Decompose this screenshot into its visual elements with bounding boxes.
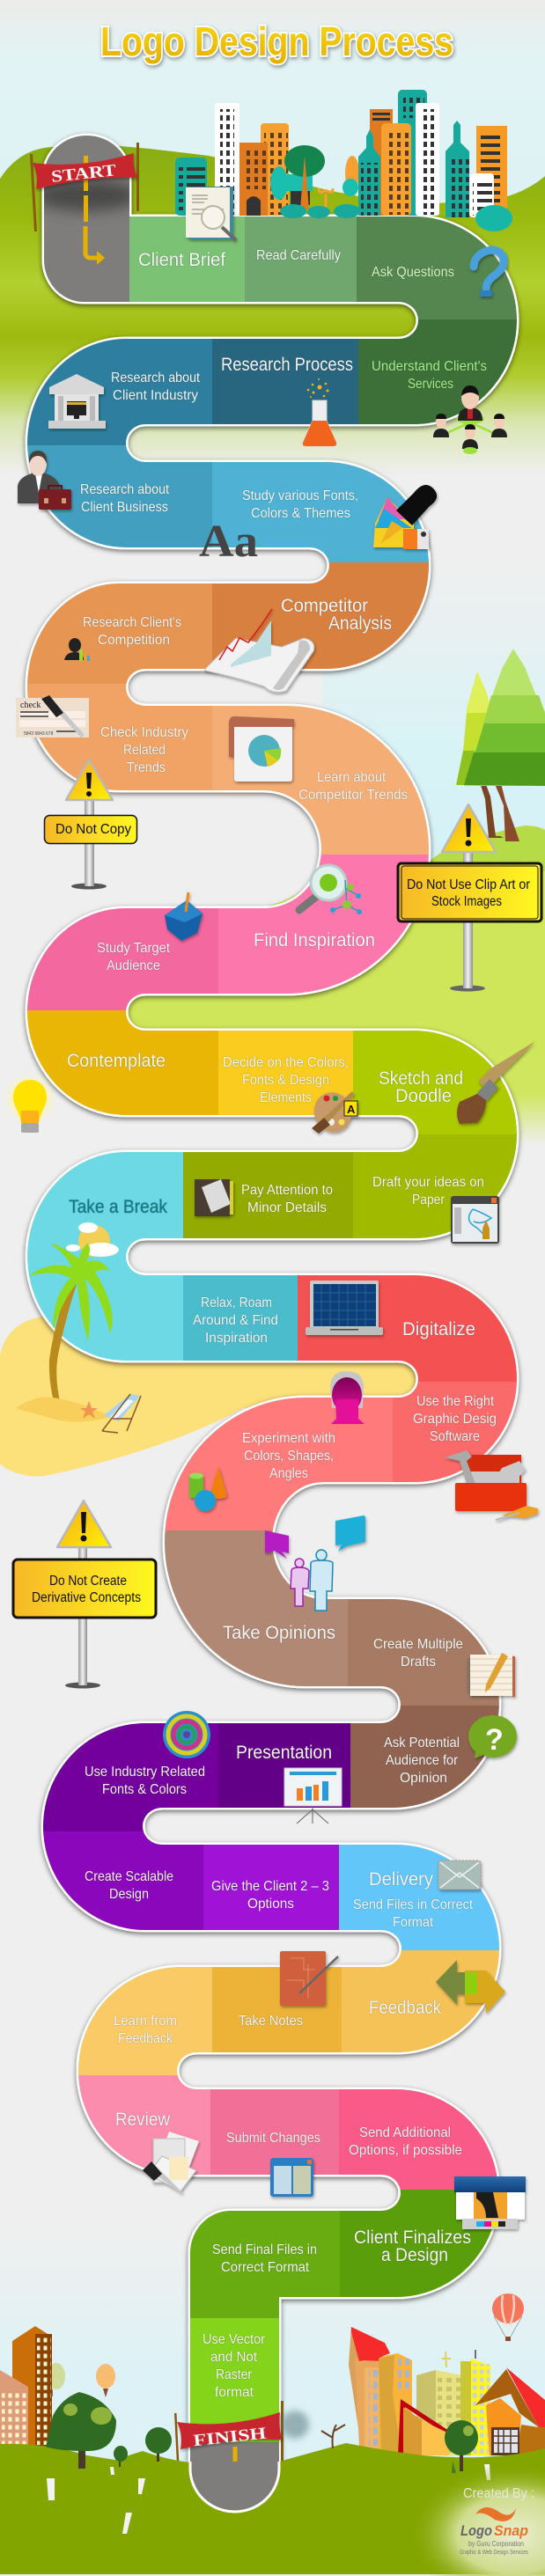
label: Submit Changes: Submit Changes: [226, 2131, 320, 2146]
icon: colour swatches with dropper: [373, 485, 437, 549]
label: Contemplate: Contemplate: [67, 1050, 166, 1071]
warning post: Do Not Copy: Do Not Copy: [55, 822, 131, 837]
sand beach: [0, 1316, 418, 1477]
title: Logo Design Process: [100, 18, 453, 64]
label: Ask Potential Audience for Opinion: Opinion: [400, 1771, 447, 1786]
label: Research Client's Competition: [83, 615, 181, 648]
icon: brief with magnifier: [186, 187, 236, 240]
label: Use Vector and Not Raster format: Use Vector: [203, 2332, 266, 2347]
icon: Aa type sample: Aa: [199, 517, 258, 567]
balloon: left orange: [96, 2364, 115, 2397]
lime meadow fading: [414, 1031, 545, 1145]
label: Use the Right Graphic Desig Software: Use the Right: [416, 1394, 495, 1409]
label: Send Additional Options, if possible: Options, if possible: [349, 2143, 462, 2158]
label: Competitor Analysis: Competitor: [281, 595, 368, 616]
icon: feedback arrows: [436, 1960, 505, 2014]
balloon: right: [492, 2293, 524, 2341]
label: Send Additional Options, if possible: Send Additional: [359, 2125, 451, 2140]
label: Sketch and Doodle: Sketch and: [379, 1068, 463, 1089]
white fence posts: [47, 2464, 490, 2534]
label: Decide on the Colors, Fonts & Design Elements: Elements: [260, 1090, 312, 1105]
label: Digitalize: Digitalize: [402, 1318, 475, 1339]
icon: magnifier with molecule: [299, 865, 362, 914]
icon: notebook: [195, 1179, 233, 1216]
icon: rainbow spiral disc: [163, 1711, 210, 1758]
label: Understand Client's Services: Understand Client's: [372, 359, 487, 374]
label: Study various Fonts, Colors & Themes: [242, 488, 358, 521]
warning post: Do Not Use Clip Art: [398, 804, 541, 991]
sky: middle right: [323, 563, 545, 867]
label: Experiment with Colors, Shapes, Angles: Colors, Shapes,: [244, 1449, 334, 1464]
label: Competitor Analysis: Analysis: [328, 613, 392, 634]
label: Research about Client Business: Research about: [80, 482, 169, 497]
icon: toolbox: [445, 1450, 538, 1520]
credit: created by: Created By :: [463, 2486, 534, 2501]
label: Learn about Competitor Trends: Learn about: [317, 770, 387, 785]
label: Send Final Files in Correct Format: Correct Format: [221, 2260, 310, 2275]
label: Understand Client's Services: Services: [408, 377, 453, 392]
warning post: Do Not Create Derivative Concepts: Derivative Concepts: [32, 1590, 141, 1605]
road foot outline: [190, 2462, 279, 2512]
icon: flask: [303, 378, 336, 446]
warning post: Do Not Use Clip Art: Do Not Use Clip Art or: [407, 877, 530, 892]
icon: question mark: [474, 250, 504, 297]
label: Use Industry Related Fonts & Colors: Use Industry Related: [85, 1765, 205, 1780]
corner glow behind credit: [409, 2464, 545, 2576]
label: Client Brief: Client Brief: [138, 249, 225, 270]
icon: beach mound with starfish and chair: [16, 1394, 141, 1433]
banner: start: [33, 153, 137, 189]
label: Research Client's Competition: Competition: [98, 633, 170, 648]
label: Take Opinions: Take Opinions: [223, 1622, 335, 1643]
icon: envelope: [438, 1860, 481, 1890]
label: Delivery: Delivery: [369, 1868, 433, 1890]
label: Review: Review: [115, 2109, 170, 2130]
icon: cheque with pen: check: [20, 701, 41, 710]
green hills behind the start: [0, 145, 545, 475]
label: Send Final Files in Correct Format: Send Final Files in: [212, 2242, 317, 2257]
icon: laptop: [306, 1281, 383, 1335]
label: Send Final Files in Correct Format: [212, 2242, 317, 2275]
icon: green question bubble: [468, 1715, 517, 1758]
grassy island under trees: [423, 826, 545, 871]
label: Research Client's Competition: Research Client's: [83, 615, 181, 630]
trees: right side: [456, 649, 545, 841]
label: Use the Right Graphic Desig Software: [413, 1394, 497, 1444]
label: Research about Client Business: Client Business: [81, 500, 168, 515]
label: Use the Right Graphic Desig Software: Software: [430, 1429, 480, 1444]
label: Research about Client Industry: Client Industry: [113, 388, 198, 403]
icon: blue software window: [270, 2158, 313, 2197]
label: Understand Client's Services: [372, 359, 487, 392]
arrow: start lane: [85, 226, 105, 265]
label: Send Files in Correct Format: Format: [393, 1915, 434, 1930]
credit: created by: Snap: [494, 2522, 528, 2539]
green ground: left: [0, 2443, 545, 2574]
label: Study various Fonts, Colors & Themes: Colors & Themes: [251, 506, 350, 521]
credit: created by: Logo: [460, 2522, 492, 2539]
label: Learn from Feedback: Learn from: [114, 2014, 177, 2029]
warning post: Do Not Create Derivative Concepts: [13, 1501, 156, 1688]
label: Check Industry Related Trends: Trends: [127, 760, 166, 775]
icon: papers and pen: [143, 2132, 199, 2194]
shadow behind finish banner: [281, 2411, 309, 2439]
icon: pie chart calendar: [229, 716, 294, 782]
icon: blue target cube: [165, 892, 203, 941]
label: Pay Attention to Minor Details: Minor Details: [247, 1200, 327, 1215]
label: Sketch and Doodle: Doodle: [395, 1085, 452, 1106]
icon: two people figures: [291, 1550, 333, 1611]
label: Draft your ideas on Paper: Paper: [412, 1193, 446, 1207]
label: Give the Client 2 – 3 Options: Give the Client 2 – 3: [211, 1879, 329, 1894]
label: Ask Potential Audience for Opinion: [384, 1736, 460, 1786]
label: Decide on the Colors, Fonts & Design Elements: [223, 1055, 349, 1105]
label: Learn from Feedback: Feedback: [118, 2031, 173, 2046]
icon: businessman with briefcase: [18, 451, 71, 510]
label: Relax, Roam Around & Find Inspiration: [193, 1295, 278, 1346]
icon: paint brush: [457, 1041, 535, 1124]
icon: 3D shapes: [189, 1466, 227, 1511]
label: Experiment with Colors, Shapes, Angles: Angles: [269, 1466, 308, 1481]
icon: speech bubble blue: [335, 1516, 365, 1552]
label: Create Multiple Drafts: Drafts: [401, 1655, 436, 1670]
label: Sketch and Doodle: [379, 1068, 463, 1106]
credit: created by: [460, 2486, 534, 2556]
label: Create Multiple Drafts: [373, 1637, 463, 1670]
label: Pay Attention to Minor Details: Pay Attention to: [241, 1183, 333, 1198]
label: Use Vector and Not Raster format: [203, 2332, 266, 2400]
label: Relax, Roam Around & Find Inspiration: Inspiration: [205, 1331, 268, 1346]
label: Create Multiple Drafts: Create Multiple: [373, 1637, 463, 1652]
sign pole: start right: [136, 143, 139, 211]
label: Research about Client Industry: [111, 371, 200, 403]
icon: competitor silhouette with bars: [64, 638, 90, 661]
label: Send Files in Correct Format: [353, 1897, 474, 1930]
label: Use Industry Related Fonts & Colors: [85, 1765, 205, 1797]
label: Study Target Audience: [97, 941, 171, 973]
label: Pay Attention to Minor Details: [241, 1183, 333, 1215]
icon: bank building: [48, 374, 106, 429]
label: Ask Potential Audience for Opinion: Ask Potential: [384, 1736, 460, 1750]
banner: finish: FINISH: [193, 2425, 268, 2450]
buildings: right: [349, 2327, 545, 2455]
label: Presentation: Presentation: [236, 1742, 332, 1763]
icon: light bulb: [9, 1077, 51, 1133]
icon: green question bubble: ?: [485, 1723, 504, 1757]
icon: chart on paper roll: [205, 609, 314, 693]
icon: speech bubble purple: [265, 1530, 289, 1559]
label: Take a Break: Take a Break: [69, 1196, 167, 1217]
label: Give the Client 2 – 3 Options: [211, 1879, 329, 1912]
label: Use Industry Related Fonts & Colors: Fonts & Colors: [102, 1782, 187, 1797]
label: Ask Questions: Ask Questions: [372, 265, 454, 280]
label: Check Industry Related Trends: Related: [123, 743, 166, 758]
credit: created by: Graphic & Web Design Services: [460, 2550, 528, 2556]
label: Use Vector and Not Raster format: format: [215, 2385, 254, 2400]
sign pole: start left: [30, 154, 37, 231]
label: Find Inspiration: Find Inspiration: [254, 929, 375, 950]
label: Decide on the Colors, Fonts & Design Elements: Decide on the Colors,: [223, 1055, 349, 1070]
sky: bottom: [0, 2227, 545, 2473]
label: Use Vector and Not Raster format: and Not: [210, 2350, 258, 2365]
label: Draft your ideas on Paper: [372, 1175, 484, 1207]
label: Decide on the Colors, Fonts & Design Elements: Fonts & Design: [242, 1073, 329, 1088]
arrow: finish lane: [229, 2447, 241, 2488]
label: Relax, Roam Around & Find Inspiration: Relax, Roam: [201, 1295, 272, 1310]
label: Client Finalizes a Design: [354, 2227, 471, 2265]
label: Study various Fonts, Colors & Themes: Study various Fonts,: [242, 488, 358, 503]
icon: palm tree: [29, 1244, 113, 1410]
balloon: left green: [48, 2363, 65, 2396]
icon: palette with letter A: [308, 1087, 357, 1138]
label: Experiment with Colors, Shapes, Angles: Experiment with: [242, 1431, 335, 1446]
label: Experiment with Colors, Shapes, Angles: [242, 1431, 335, 1481]
icon: cheque with pen: [16, 695, 89, 738]
label: Send Files in Correct Format: Send Files in Correct: [353, 1897, 474, 1912]
icon: cheque with pen: 5843 5843 678: [24, 731, 54, 737]
buildings: left: [0, 2326, 52, 2447]
icon: presentation board: [284, 1768, 342, 1824]
label: Research Process: Research Process: [221, 354, 353, 375]
label: Learn about Competitor Trends: Competitor Trends: [298, 788, 408, 803]
trees on ground: [46, 2392, 478, 2473]
label: Create Scalable Design: [85, 1869, 173, 1902]
label: Check Industry Related Trends: [100, 725, 188, 775]
icon: notepad with pencil: [468, 1653, 515, 1697]
lime meadow: [123, 867, 545, 1031]
credit: created by: by Guru Corporation: [468, 2540, 524, 2548]
label: Read Carefully: Read Carefully: [256, 248, 341, 263]
warning post: Do Not Use Clip Art: Stock Images: [431, 894, 502, 909]
warning post: Do Not Copy: [44, 760, 137, 889]
road centre dashed line: [84, 156, 88, 222]
label: Check Industry Related Trends: Check Industry: [100, 725, 188, 740]
icon: vector software window: [451, 1196, 499, 1244]
label: Create Scalable Design: Design: [109, 1887, 149, 1902]
icon: large format printer: [454, 2176, 526, 2229]
label: Draft your ideas on Paper: Draft your ideas on: [372, 1175, 484, 1190]
poles: finish banner: [174, 2401, 284, 2491]
icon: red notebook and pen: [280, 1951, 338, 2006]
sky: top: [0, 0, 545, 229]
label: Research about Client Business: [80, 482, 169, 515]
label: Feedback: Feedback: [369, 1997, 441, 2018]
label: Send Additional Options, if possible: [349, 2125, 462, 2158]
label: Relax, Roam Around & Find Inspiration: Around & Find: [193, 1313, 278, 1328]
label: Ask Potential Audience for Opinion: Audience for: [386, 1753, 459, 1768]
label: Create Scalable Design: Create Scalable: [85, 1869, 173, 1884]
label: Give the Client 2 – 3 Options: Options: [247, 1897, 294, 1912]
label: Study Target Audience: Audience: [107, 958, 160, 973]
label: Research about Client Industry: Research about: [111, 371, 200, 385]
banner: finish: [177, 2412, 282, 2450]
label: Learn from Feedback: [114, 2014, 177, 2046]
icon: sun and clouds: [66, 1222, 119, 1257]
label: Use Vector and Not Raster format: Raster: [216, 2367, 253, 2382]
label: Take Notes: Take Notes: [239, 2014, 303, 2029]
label: Use the Right Graphic Desig Software: Graphic Desig: [413, 1412, 497, 1427]
warning post: Do Not Create Derivative Concepts: Do Not Create: [49, 1574, 127, 1589]
label: Study Target Audience: Study Target: [97, 941, 171, 956]
icon: people network: [433, 385, 507, 454]
label: Client Finalizes a Design: a Design: [381, 2244, 448, 2265]
label: Client Finalizes a Design: Client Finalizes: [354, 2227, 471, 2248]
banner: start: START: [50, 161, 117, 187]
label: Learn about Competitor Trends: [298, 770, 408, 803]
label: Competitor Analysis: [281, 595, 392, 634]
city skyline: [175, 90, 512, 231]
icon: palette with letter A: A: [347, 1103, 356, 1116]
icon: paint bucket: [330, 1371, 365, 1424]
